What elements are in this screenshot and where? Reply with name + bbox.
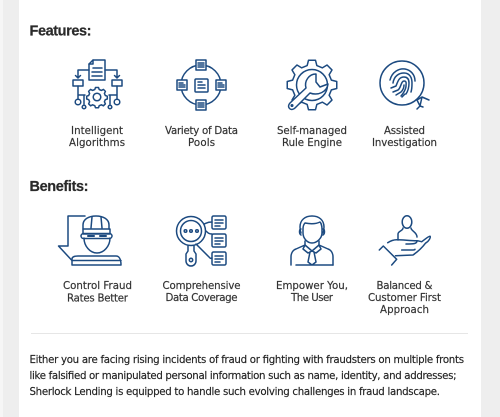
- benefit: Balanced & Customer First Approach: [368, 216, 441, 316]
- feature: Self-managed Rule Engine: [277, 60, 347, 149]
- label: Intelligent Algorithms: [69, 126, 125, 149]
- label: Assisted Investigation: Investigation: [372, 138, 437, 149]
- icon: hand holding person: [379, 216, 430, 265]
- icon: fraudster with down arrow: [58, 216, 121, 265]
- label: Variety of Data Pools: Pools: [188, 138, 215, 149]
- feature: Intelligent Algorithms: [69, 60, 125, 149]
- label: Balanced & Customer First Approach: Customer First: [368, 293, 441, 304]
- label: Self-managed Rule Engine: Self-managed: [277, 126, 347, 137]
- label: Comprehensive Data Coverage: Data Coverage: [166, 293, 238, 304]
- label: Balanced & Customer First Approach: [368, 281, 441, 316]
- feature: Assisted Investigation: [372, 61, 437, 149]
- label: Self-managed Rule Engine: [277, 126, 347, 149]
- label: Variety of Data Pools: [165, 126, 238, 149]
- feature: Variety of Data Pools: [165, 60, 238, 149]
- text block: description paragraph: Either you are facing rising incidents of fraud or fighting with fraudsters on multiple fronts: [30, 355, 464, 366]
- text block: description paragraph: [30, 355, 464, 398]
- icon: magnifier with data records: [176, 216, 226, 266]
- label: Empower You, The User: The User: [290, 293, 334, 304]
- label: Intelligent Algorithms: Intelligent: [71, 126, 123, 137]
- icon: algorithm document and gear: [73, 60, 122, 109]
- icon: gear and wrench: [287, 60, 337, 110]
- benefit: Comprehensive Data Coverage: [162, 216, 240, 304]
- label: Assisted Investigation: [372, 126, 437, 149]
- text block: description paragraph: like falsified or manipulated personal information such as name, identity, and addresses;: [30, 371, 456, 382]
- benefit: Control Fraud Rates Better: [58, 216, 132, 304]
- label: Intelligent Algorithms: Algorithms: [69, 138, 125, 149]
- label: Empower You, The User: Empower You,: [276, 281, 348, 292]
- label: Empower You, The User: [276, 281, 348, 304]
- label: Comprehensive Data Coverage: [162, 281, 240, 304]
- label: Control Fraud Rates Better: Control Fraud: [63, 281, 132, 292]
- icon: fingerprint magnifier: [380, 61, 429, 109]
- label: Assisted Investigation: Assisted: [384, 126, 425, 137]
- icon: data pools ring: [177, 60, 226, 110]
- label: Balanced & Customer First Approach: Approach: [380, 305, 429, 316]
- label: Control Fraud Rates Better: [63, 281, 132, 304]
- benefit: Empower You, The User: [276, 216, 348, 304]
- label: Control Fraud Rates Better: Rates Better: [67, 294, 129, 304]
- heading: Features: Features:: [30, 24, 92, 40]
- label: Comprehensive Data Coverage: Comprehensive: [162, 281, 240, 292]
- icon: person with tie: [291, 216, 333, 265]
- text block: description paragraph: Sherlock Lending is equipped to handle such evolving challenges in fraud landscape.: [30, 387, 440, 398]
- label: Balanced & Customer First Approach: Balanced &: [376, 281, 433, 292]
- label: Self-managed Rule Engine: Rule Engine: [282, 138, 342, 149]
- heading: Benefits: Benefits:: [30, 179, 88, 195]
- label: Variety of Data Pools: Variety of Data: [165, 126, 238, 137]
